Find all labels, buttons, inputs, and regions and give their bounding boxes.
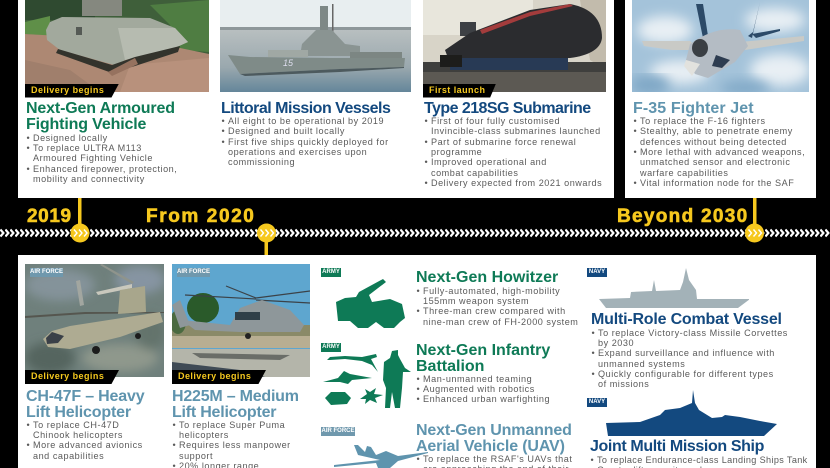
title [416, 342, 550, 375]
bullet text: To replace CH-47D [33, 420, 119, 430]
card: Next-Gen UAV [321, 422, 572, 468]
title: Lift Helicopter [26, 404, 131, 421]
title [416, 422, 572, 455]
tag: delivery begins: Delivery begins [31, 84, 104, 94]
tag: first launch [423, 84, 496, 98]
bullet text: programme [431, 147, 482, 157]
bullet text: support [179, 451, 213, 461]
card: Next-Gen Armoured Fighting Vehicle [25, 0, 209, 184]
timeline: chevron band with milestone nodes [0, 198, 830, 255]
icon: howitzer silhouette [336, 279, 405, 328]
panel: lower programmes [18, 255, 816, 468]
photo: Chinook helicopter [25, 264, 164, 377]
pill: army [321, 268, 341, 277]
bullet text [26, 132, 177, 184]
panel: top-left vehicles and ships [18, 0, 614, 198]
title [26, 388, 144, 421]
card: Next-Gen Howitzer [321, 268, 578, 328]
card: Joint Multi Mission Ship [587, 390, 808, 468]
bullet text: All eight to be operational by 2019 [228, 116, 384, 126]
bullet text: More advanced avionics [33, 440, 143, 450]
title: Type 218SG Submarine [424, 100, 591, 117]
bullet text: mobility and connectivity [33, 174, 145, 184]
bullet text: To replace Endurance-class Landing Ships Tank [597, 455, 808, 465]
bullet text: Improved operational and [431, 157, 547, 167]
pill: army: ARMY [322, 269, 340, 275]
title: Battalion [416, 358, 484, 375]
bullet text: and capabilities [33, 451, 104, 461]
bullet text: To replace the RSAF's UAVs that [423, 454, 572, 464]
bullet text: defences without being detected [640, 137, 787, 147]
pill: air force [177, 268, 210, 277]
panel: F-35 [625, 0, 816, 198]
bullet text: First of four fully customised [431, 116, 560, 126]
tag: delivery begins [25, 370, 119, 384]
bullet text [416, 454, 572, 468]
title: Next-Gen Unmanned [416, 422, 572, 439]
year label: 2019: 2019 [27, 206, 72, 227]
bullet text: operations and exercises upon [228, 147, 367, 157]
photo: littoral mission vessel [220, 0, 411, 92]
bullet text: unmatched sensor and electronic [640, 157, 790, 167]
bullet text [26, 420, 143, 461]
title: H225M – Medium [172, 388, 299, 405]
bullet text: Invincible-class submarines launched [431, 126, 601, 136]
title: Joint Multi Mission Ship [590, 438, 764, 455]
icon: soldier and unmanned systems [323, 350, 411, 408]
bullet text: To replace Victory-class Missile Corvettes [598, 328, 788, 338]
pill: air force [30, 268, 63, 277]
card: Multi-Role Combat Vessel [587, 268, 788, 389]
bullet text [424, 116, 602, 188]
pill: navy: NAVY [589, 269, 605, 275]
pill: navy [587, 398, 607, 407]
tag: delivery begins [172, 370, 266, 384]
bullet text: of missions [598, 379, 649, 389]
icon: joint ship silhouette [606, 390, 777, 436]
bullet text: Delivery expected from 2021 onwards [431, 178, 602, 188]
pill: navy: NAVY [589, 399, 605, 405]
photo: armoured fighting vehicle [25, 0, 209, 92]
tag: delivery begins [25, 84, 119, 98]
pill: navy [587, 268, 607, 277]
photo: F-35 jet [632, 0, 809, 92]
bullet text: Requires less manpower [179, 440, 291, 450]
title: CH-47F – Heavy [26, 388, 144, 405]
bullet text [416, 374, 550, 404]
bullet text: unmanned systems [598, 359, 685, 369]
bullet text: Chinook helicopters [33, 430, 123, 440]
bullet text: Designed locally [33, 132, 108, 142]
bullet text: Augmented with robotics [423, 384, 535, 394]
bullet text: Three-man crew compared with [423, 306, 566, 316]
tag: first launch: First launch [429, 84, 485, 94]
bullet text: Quickly configurable for different types [598, 369, 774, 379]
card: Littoral Mission Vessels [220, 0, 411, 167]
bullet text [222, 116, 389, 167]
bullet text: Armoured Fighting Vehicle [33, 153, 153, 163]
card: Next-Gen Infantry Battalion [321, 342, 550, 408]
title: Multi-Role Combat Vessel [591, 311, 782, 328]
bullet text: helicopters [179, 430, 229, 440]
photo: H225M helicopter [172, 264, 310, 377]
bullet text: 155mm weapon system [423, 296, 529, 306]
bullet text: commissioning [228, 157, 295, 167]
bullet text: nine-man crew of FH-2000 system [423, 317, 578, 327]
bullet text [416, 286, 578, 327]
bullet text: Stealthy, able to penetrate enemy [640, 126, 793, 136]
title: Next-Gen Infantry [416, 342, 550, 359]
bullet text: First five ships quickly deployed for [228, 137, 389, 147]
bullet text: combat capabilities [431, 168, 518, 178]
year label: Beyond 2030: Beyond 2030 [617, 206, 749, 227]
title [172, 388, 299, 421]
bullet text: Vital information node for the SAF [640, 178, 794, 188]
pill: army [321, 343, 341, 352]
title: Aerial Vehicle (UAV) [416, 438, 565, 455]
title: Lift Helicopter [172, 404, 276, 421]
card: F-35 Fighter Jet [632, 0, 809, 188]
year label: From 2020: From 2020 [146, 206, 255, 227]
bullet text [172, 420, 291, 468]
title: Fighting Vehicle [26, 116, 146, 133]
card: CH-47F [25, 264, 164, 461]
card: H225M [172, 264, 310, 468]
pill: air force: AIR FORCE [177, 269, 210, 275]
title: Next-Gen Armoured [26, 100, 175, 117]
pill: air force: AIR FORCE [322, 428, 354, 434]
bullet text: To replace Super Puma [179, 420, 285, 430]
pill: air force [321, 427, 355, 436]
bullet text: Man-unmanned teaming [423, 374, 532, 384]
bullet text: To replace ULTRA M113 [33, 143, 142, 153]
bullet text: More lethal with advanced weapons, [640, 147, 805, 157]
title: Littoral Mission Vessels [221, 100, 390, 117]
bullet text: Designed and built locally [228, 126, 345, 136]
bullet text: To replace the F-16 fighters [640, 116, 766, 126]
bullet text [634, 116, 805, 188]
bullet text: by 2030 [598, 338, 634, 348]
bullet text: Enhanced urban warfighting [423, 394, 550, 404]
bullet text: Part of submarine force renewal [431, 137, 576, 147]
icon: UAV silhouette [334, 445, 428, 468]
photo: submarine [423, 0, 606, 92]
title [26, 100, 175, 133]
tag: delivery begins: Delivery begins [178, 371, 251, 381]
icon: combat vessel silhouette [599, 268, 749, 308]
bullet text: Expand surveillance and influence with [598, 348, 775, 358]
title: F-35 Fighter Jet [633, 100, 754, 117]
bullet text [592, 328, 788, 389]
bullet text: warfare capabilities [640, 168, 728, 178]
pill: air force: AIR FORCE [30, 269, 63, 275]
title: Next-Gen Howitzer [416, 269, 558, 286]
tag: delivery begins: Delivery begins [31, 371, 104, 381]
photo: littoral mission vessel: 15 [283, 58, 294, 68]
card: Type 218SG Submarine [423, 0, 606, 188]
bullet text: Fully-automated, high-mobility [423, 286, 560, 296]
pill: army: ARMY [322, 344, 340, 350]
bullet text: Enhanced firepower, protection, [33, 164, 177, 174]
